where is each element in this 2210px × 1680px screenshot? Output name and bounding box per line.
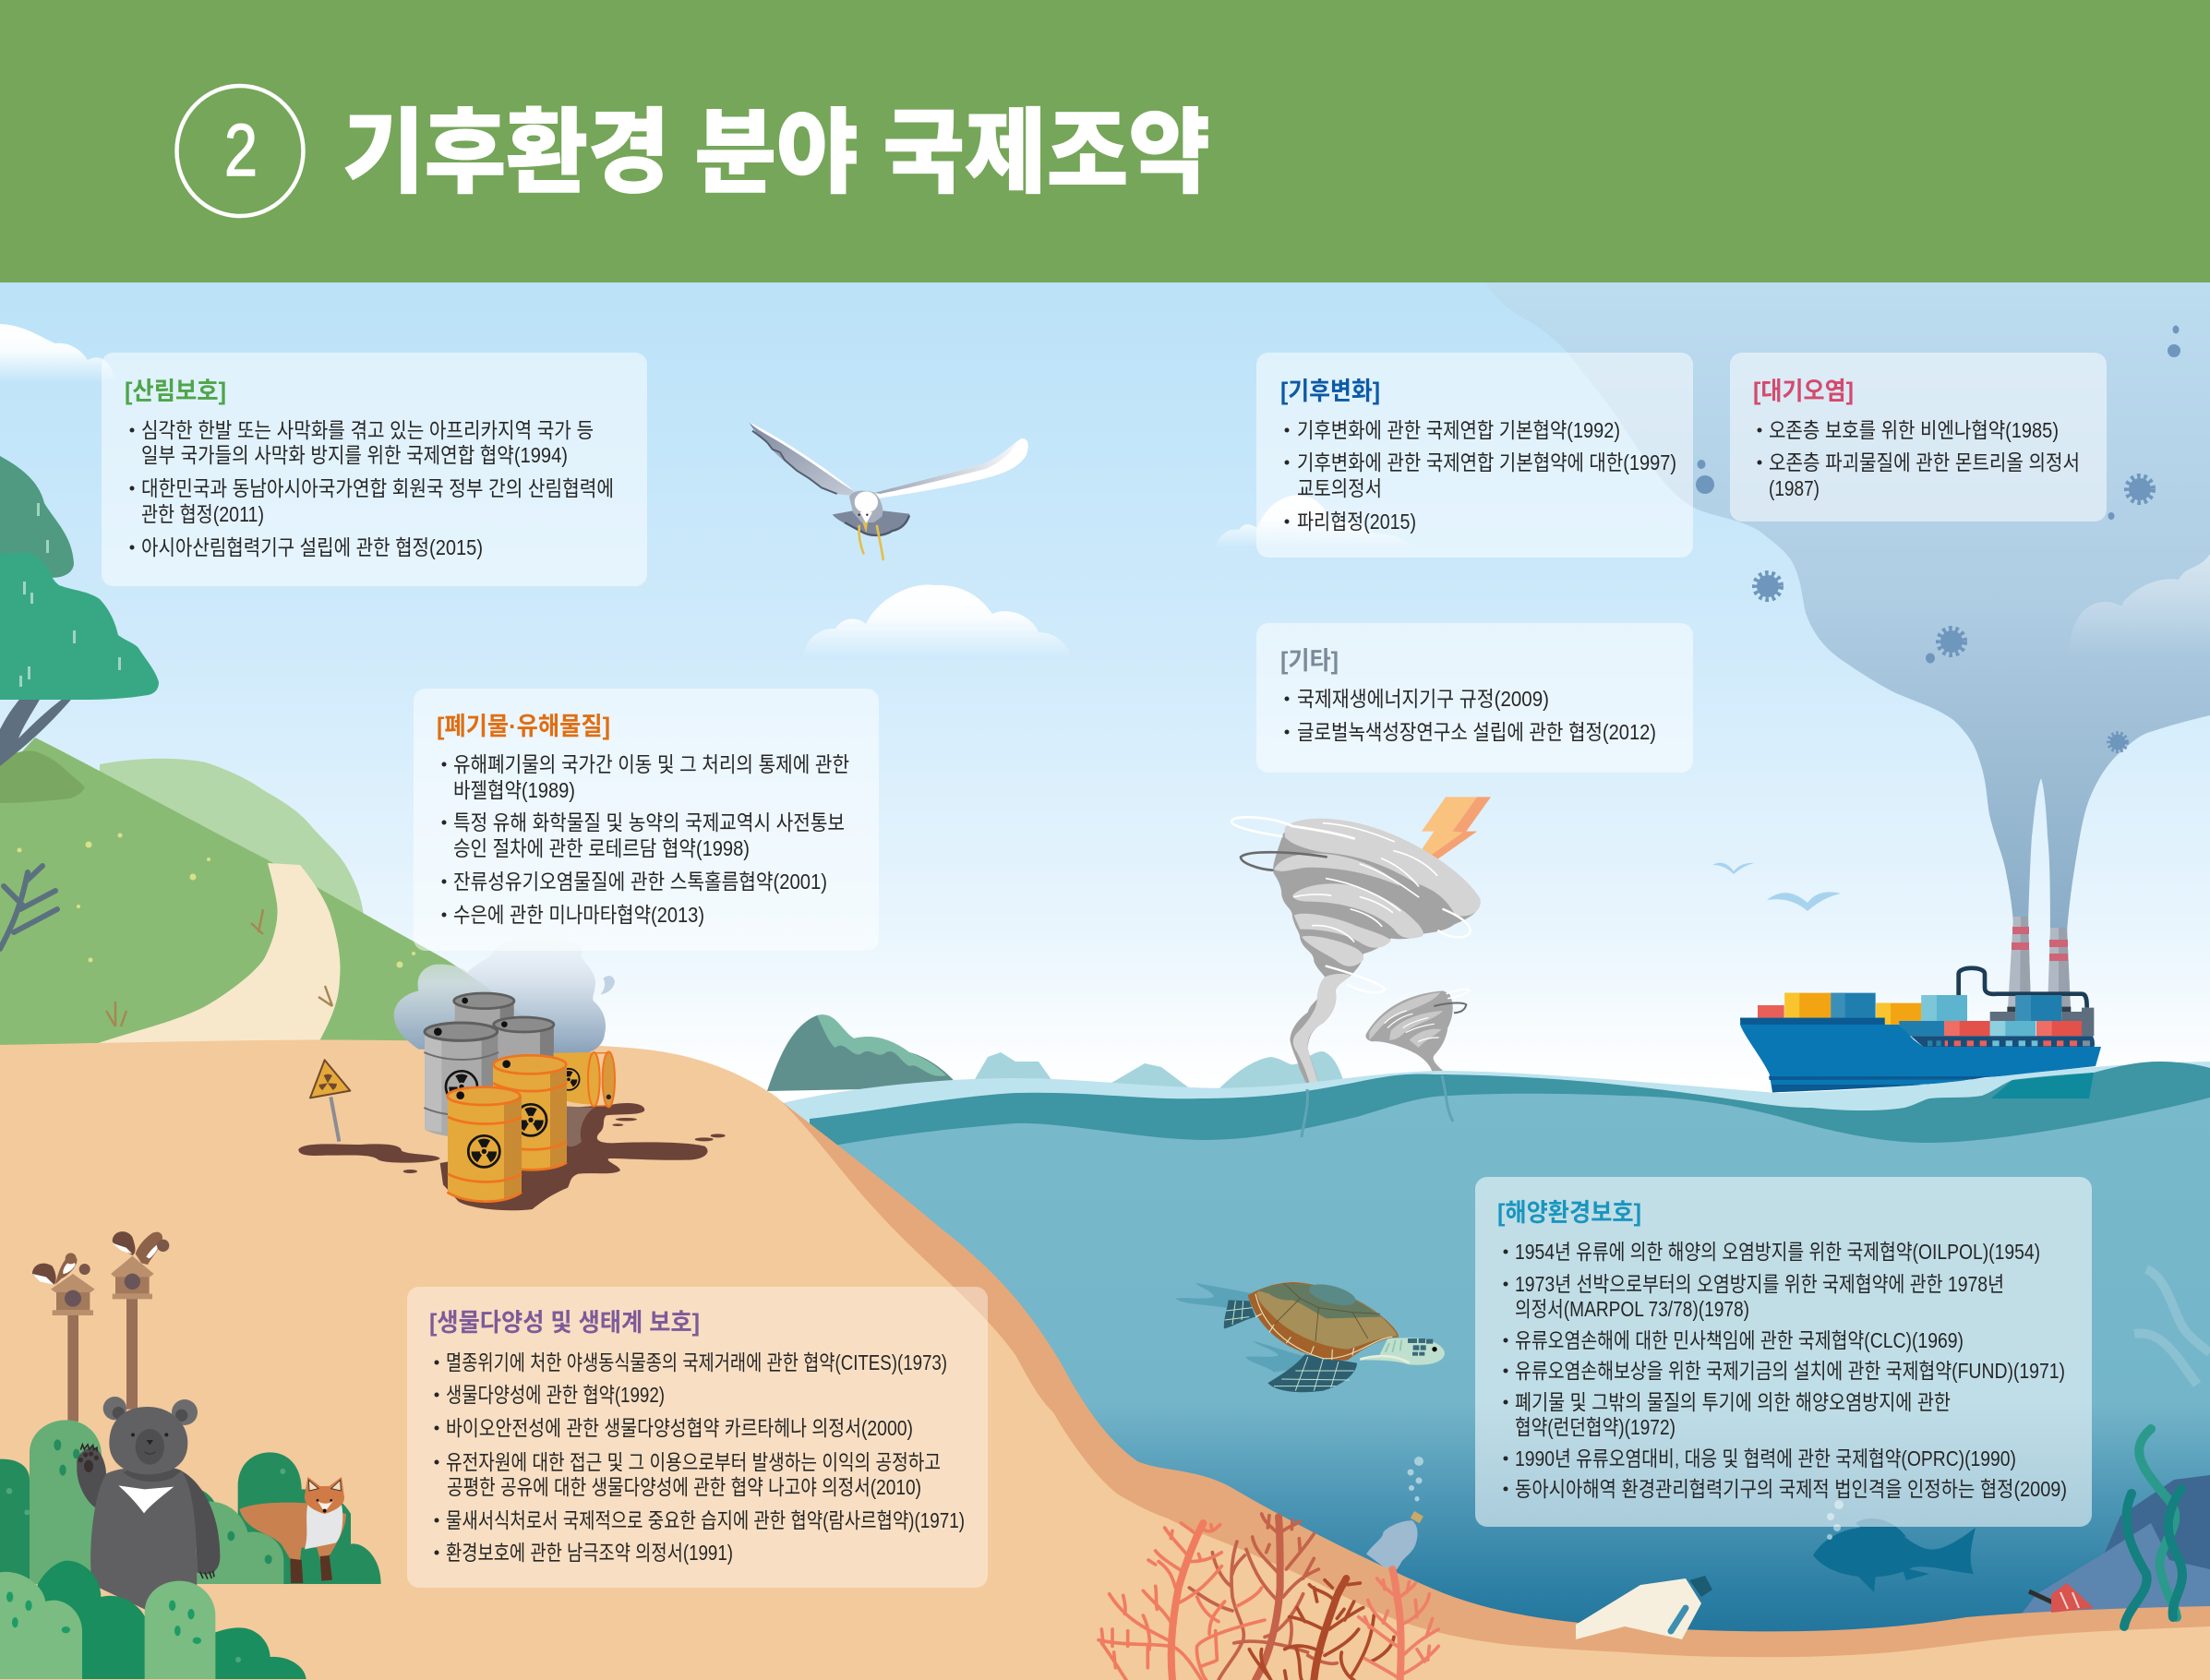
grey barrels: [424, 993, 554, 1137]
coral salmon tree: [1099, 1523, 1265, 1680]
treaty list: 오존층 보호를 위한 비엔나협약(1985): [1769, 418, 2059, 442]
treaty list: 기후변화에 관한 국제연합 기본협약(1992): [1297, 418, 1620, 442]
treaty list: [434, 1350, 965, 1565]
sky background: [0, 282, 2210, 1206]
treaty list: [129, 418, 614, 559]
icon: bubbles: [1407, 1457, 1423, 1501]
treaty list: 멸종위기에 처한 야생동식물종의 국제거래에 관한 협약(CITES)(1973): [446, 1350, 947, 1374]
treaty list: 관한 협정(2011): [141, 502, 264, 526]
treaty list: 공평한 공유에 대한 생물다양성에 관한 협약 나고야 의정서(2010): [447, 1475, 921, 1499]
dirt path: [92, 863, 341, 1045]
front bushes: [0, 1561, 306, 1679]
sea: [766, 1062, 2210, 1680]
heading: [산림보호]: [125, 378, 226, 405]
pollution particles: [1696, 325, 2180, 751]
treaty list: 생물다양성에 관한 협약(1992): [446, 1383, 665, 1407]
treaty list: 잔류성유기오염물질에 관한 스톡홀름협약(2001): [453, 870, 827, 894]
treaty list: 수은에 관한 미나마타협약(2013): [453, 903, 704, 927]
treaty list: 국제재생에너지기구 규정(2009): [1297, 687, 1549, 711]
treaty list: 동아시아해역 환경관리협력기구의 국제적 법인격을 인정하는 협정(2009): [1515, 1477, 2067, 1501]
birdhouses: [51, 1256, 154, 1422]
spill puddle: [298, 1103, 726, 1210]
panel: air pollution: [1730, 353, 2107, 522]
title: 기후환경 분야 국제조약: [342, 102, 1210, 205]
treaty list: 파리협정(2015): [1297, 510, 1416, 534]
treaty list: 글로벌녹색성장연구소 설립에 관한 협정(2012): [1297, 720, 1656, 744]
header banner: [0, 0, 2210, 282]
hills: [0, 738, 563, 1052]
treaty list: 심각한 한발 또는 사막화를 겪고 있는 아프리카지역 국가 등: [141, 418, 594, 442]
treaty list: 기후변화에 관한 국제연합 기본협약에 대한(1997): [1297, 450, 1676, 474]
factory smoke plume: [1486, 282, 2210, 932]
panel: biodiversity and ecosystem protection: [407, 1287, 988, 1588]
treaty list: 특정 유해 화학물질 및 농약의 국제교역시 사전통보: [453, 810, 845, 834]
rocks: [2013, 1475, 2210, 1625]
treaty list: [1285, 687, 1656, 744]
treaty list: 아시아산림협력기구 설립에 관한 협정(2015): [141, 535, 483, 559]
treaty list: 오존층 파괴물질에 관한 몬트리올 의정서: [1769, 450, 2080, 474]
coral right tree: [1359, 1569, 1438, 1680]
heading: [해양환경보호]: [1497, 1199, 1641, 1227]
back bushes: [0, 1420, 381, 1584]
chimneys: [2008, 917, 2071, 1008]
distant mountains: [767, 1014, 1345, 1091]
treaty list: [1503, 1240, 2067, 1501]
treaty list: 바이오안전성에 관한 생물다양성협약 카르타헤나 의정서(2000): [446, 1416, 913, 1440]
trees: [0, 456, 159, 766]
panel: others: [1256, 623, 1693, 773]
icon: traffic cone: [2029, 1583, 2094, 1613]
panel: climate change: [1256, 353, 1693, 558]
number badge: 2: [224, 109, 258, 191]
fox: [239, 1477, 346, 1583]
panel: waste and hazardous substances: [414, 689, 879, 951]
animals and bushes: [0, 1231, 381, 1679]
panel: forest protection: [102, 353, 647, 586]
treaty list: 유류오염손해에 대한 민사책임에 관한 국제협약(CLC)(1969): [1515, 1328, 1964, 1352]
icon: plastic jug: [1576, 1576, 1712, 1639]
treaty list: [441, 752, 849, 927]
heading: [기타]: [1280, 647, 1339, 675]
cargo ship: [1740, 968, 2101, 1092]
icon: sea turtle: [1175, 1280, 1445, 1392]
icon: coral: [1099, 1514, 1438, 1680]
coral dark tree: [1249, 1578, 1394, 1680]
treaty list: 유전자원에 대한 접근 및 그 이용으로부터 발생하는 이익의 공정하고: [446, 1450, 941, 1474]
small tornado: [1365, 990, 1470, 1077]
icon: lightning: [1422, 797, 1491, 860]
squirrels: [32, 1231, 169, 1285]
icon: toxic waste barrels: [298, 935, 726, 1210]
heading: [생물다양성 및 생태계 보호]: [429, 1309, 700, 1337]
treaty list: 유류오염손해보상을 위한 국제기금의 설치에 관한 국제협약(FUND)(1971): [1515, 1359, 2065, 1383]
treaty list: 대한민국과 동남아시아국가연합 회원국 정부 간의 산림협력에: [141, 476, 614, 500]
icon: seagull: [750, 422, 1028, 559]
tipped yellow barrel: [553, 1051, 615, 1107]
treaty list: [1758, 418, 2080, 500]
treaty list: 1973년 선박으로부터의 오염방지를 위한 국제협약에 관한 1978년: [1515, 1272, 2004, 1296]
middle yellow barrel: [493, 1055, 567, 1170]
panel: marine environment protection: [1475, 1177, 2092, 1527]
treaty list: 유해폐기물의 국가간 이동 및 그 처리의 통제에 관한: [453, 752, 849, 776]
icon: plastic bottle: [1366, 1496, 1423, 1572]
treaty list: 교토의정서: [1297, 476, 1382, 500]
treaty list: 환경보호에 관한 남극조약 의정서(1991): [446, 1541, 733, 1565]
sand beach: [0, 1040, 2210, 1680]
treaty list: 물새서식처로서 국제적으로 중요한 습지에 관한 협약(람사르협약)(1971): [446, 1508, 965, 1532]
treaty list: 바젤협약(1989): [453, 778, 575, 802]
icon: fish: [1813, 1500, 1976, 1592]
treaty list: 협약(런던협약)(1972): [1515, 1415, 1676, 1439]
icon: seaweed: [2124, 1429, 2182, 1626]
treaty list: 의정서(MARPOL 73/78)(1978): [1515, 1297, 1749, 1321]
big tornado: [1231, 817, 1481, 1087]
warning sign: [310, 1060, 350, 1142]
heading: [기후변화]: [1280, 378, 1380, 405]
number badge: [177, 86, 303, 216]
treaty list: 폐기물 및 그밖의 물질의 투기에 의한 해양오염방지에 관한: [1515, 1390, 1951, 1414]
coral mid tree: [1189, 1514, 1337, 1680]
treaty list: [1285, 418, 1676, 534]
treaty list: 승인 절차에 관한 로테르담 협약(1998): [453, 836, 750, 860]
treaty list: (1987): [1769, 476, 1820, 500]
moon bear: [77, 1397, 220, 1609]
treaty list: 1990년 유류오염대비, 대응 및 협력에 관한 국제협약(OPRC)(1990): [1515, 1446, 2016, 1470]
clouds: [0, 324, 2210, 657]
heading: [대기오염]: [1753, 378, 1854, 405]
icon: small birds: [1712, 863, 1841, 911]
front yellow barrel: [447, 1087, 522, 1202]
treaty list: 일부 국가들의 사막화 방지를 위한 국제연합 협약(1994): [141, 443, 568, 467]
icon: bare branch: [0, 866, 57, 949]
treaty list: 1954년 유류에 의한 해양의 오염방지를 위한 국제협약(OILPOL)(1954): [1515, 1240, 2040, 1264]
icon: plastic bag ghost: [2134, 1269, 2210, 1385]
heading: [폐기물·유해물질]: [437, 713, 610, 740]
